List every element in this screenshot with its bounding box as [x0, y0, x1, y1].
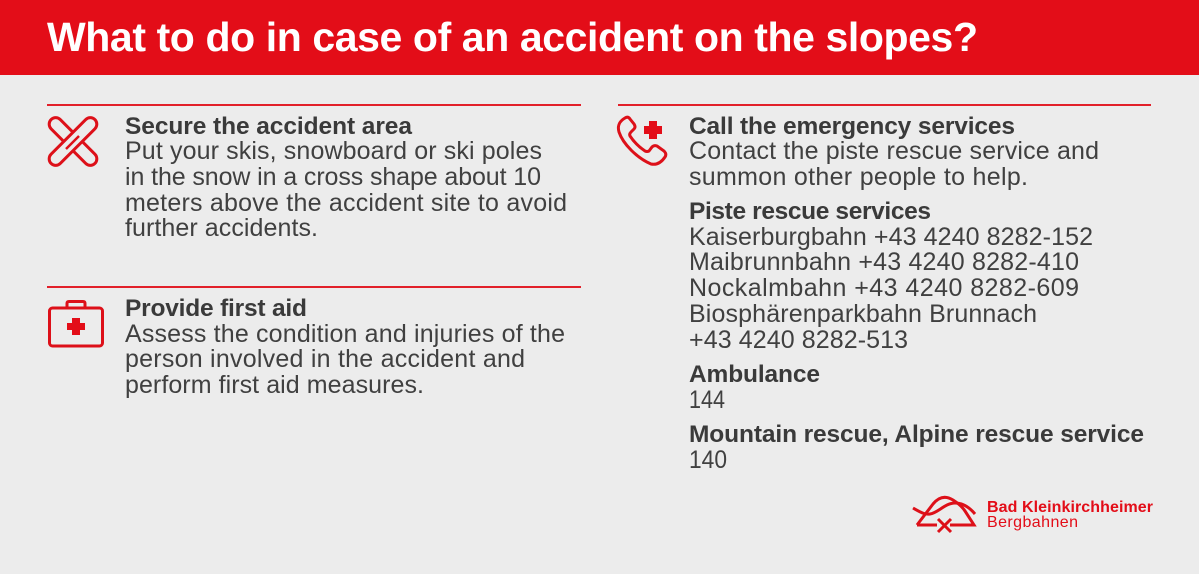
text: piste rescue services [689, 198, 1093, 354]
text: secure the accident area: Secure the accident area [125, 113, 412, 140]
icon: mountain logo [913, 497, 975, 532]
icon: phone with cross [618, 117, 666, 164]
text: ambulance: 144 [689, 386, 725, 414]
icon: first aid kit [50, 302, 102, 346]
text: call the emergency services: summon other people to help. [689, 163, 1028, 191]
panel: secure the accident area [46, 104, 581, 242]
text: piste rescue services: Nockalmbahn +43 4240 8282-609 [689, 274, 1079, 302]
title banner: What to do in case of an accident on the slopes? [47, 14, 978, 60]
text: secure the accident area: meters above the accident site to avoid [125, 189, 567, 217]
text: call the emergency services [689, 113, 1099, 191]
text: provide first aid: person involved in the accident and [125, 345, 525, 373]
text: provide first aid: Provide first aid [125, 295, 307, 322]
text: piste rescue services: Kaiserburgbahn +43 4240 8282-152 [689, 223, 1093, 251]
text: piste rescue services: +43 4240 8282-513 [689, 326, 908, 354]
text: ambulance [689, 361, 820, 414]
logo: Bad Kleinkirchheimer Bergbahnen [913, 497, 1153, 532]
text: mountain rescue [689, 421, 1144, 474]
text: provide first aid: perform first aid measures. [125, 371, 424, 399]
text: mountain rescue: 140 [689, 446, 727, 474]
text: secure the accident area: Put your skis, snowboard or ski poles [125, 137, 542, 165]
text: secure the accident area [125, 113, 567, 242]
logo: Bad Kleinkirchheimer Bergbahnen: Bad Kleinkirchheimer [987, 499, 1153, 516]
text: secure the accident area: in the snow in a cross shape about 10 [125, 163, 541, 191]
text: mountain rescue: Mountain rescue, Alpine rescue service [689, 421, 1144, 448]
text: piste rescue services: Biosphärenparkbahn Brunnach [689, 300, 1037, 328]
text: call the emergency services: Call the emergency services [689, 113, 1015, 140]
logo: Bad Kleinkirchheimer Bergbahnen: Bergbahnen [987, 514, 1078, 531]
text: piste rescue services: Piste rescue services [689, 198, 931, 225]
text: piste rescue services: Maibrunnbahn +43 4240 8282-410 [689, 248, 1079, 276]
panel: call the emergency services [618, 104, 1151, 474]
text: provide first aid: Assess the condition and injuries of the [125, 320, 565, 348]
text: provide first aid [125, 295, 565, 399]
text: call the emergency services: Contact the piste rescue service and [689, 137, 1099, 165]
text: secure the accident area: further accidents. [125, 214, 318, 242]
text: ambulance: Ambulance [689, 361, 820, 388]
icon: crossed skis [46, 115, 100, 168]
title banner [0, 0, 1199, 75]
panel: provide first aid [47, 286, 581, 399]
